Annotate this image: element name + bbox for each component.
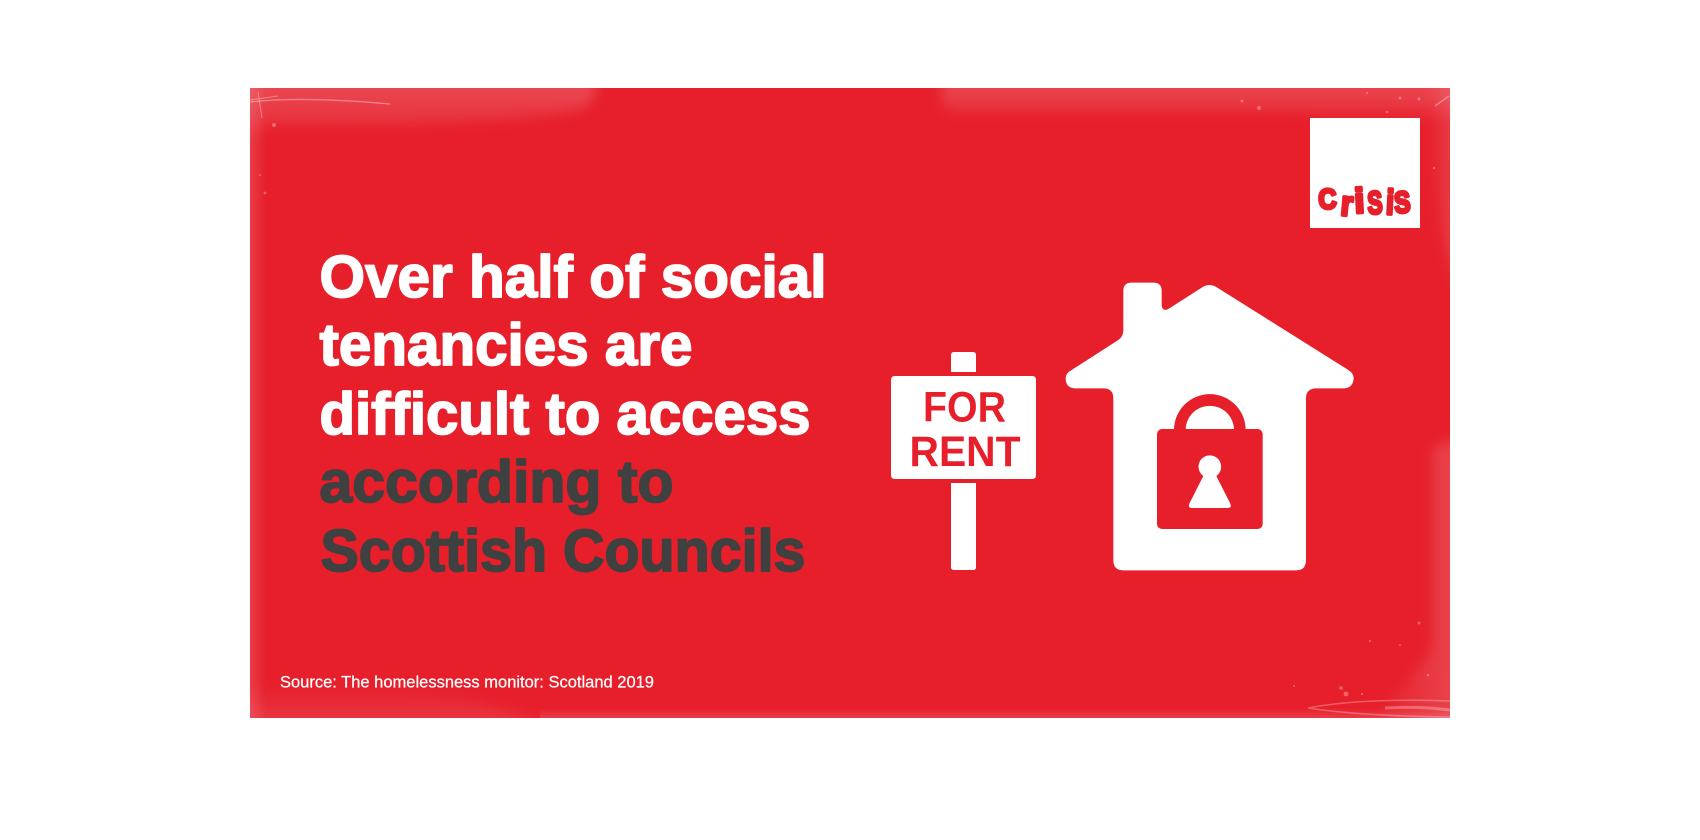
sign board	[891, 376, 1036, 479]
logo wordmark	[1318, 182, 1411, 224]
heading: according to Scottish Councils: according to	[320, 449, 674, 515]
sign text: rent: RENT	[910, 428, 1020, 476]
heading: over half of social tenancies: Over half of social	[320, 244, 826, 310]
source note: Source: The homelessness monitor: Scotland 2019	[280, 674, 654, 692]
logo wordmark: i	[1353, 182, 1365, 221]
logo wordmark: S	[1366, 184, 1383, 221]
sign post	[951, 352, 976, 570]
logo wordmark: r	[1339, 184, 1355, 224]
house silhouette	[1066, 283, 1354, 570]
logo wordmark: C	[1318, 183, 1337, 215]
padlock body	[1157, 429, 1263, 529]
logo: crisis	[1310, 118, 1420, 228]
heading: over half of social tenancies: tenancies are	[320, 312, 692, 378]
keyhole	[1189, 455, 1231, 508]
heading: over half of social tenancies: difficult to access	[320, 381, 810, 447]
heading: according to Scottish Councils: Scottish Councils	[320, 518, 806, 584]
heading: over half of social tenancies	[320, 244, 826, 447]
padlock shackle	[1174, 394, 1246, 430]
icon: house with padlock	[1066, 283, 1354, 570]
logo wordmark: S	[1393, 186, 1411, 220]
logo wordmark: i	[1385, 183, 1395, 222]
logo background	[1310, 118, 1420, 228]
panel: red background	[240, 78, 1460, 728]
icon: for rent sign	[891, 352, 1036, 570]
sign text: for: FOR	[923, 384, 1006, 432]
heading: according to Scottish Councils	[320, 449, 806, 584]
